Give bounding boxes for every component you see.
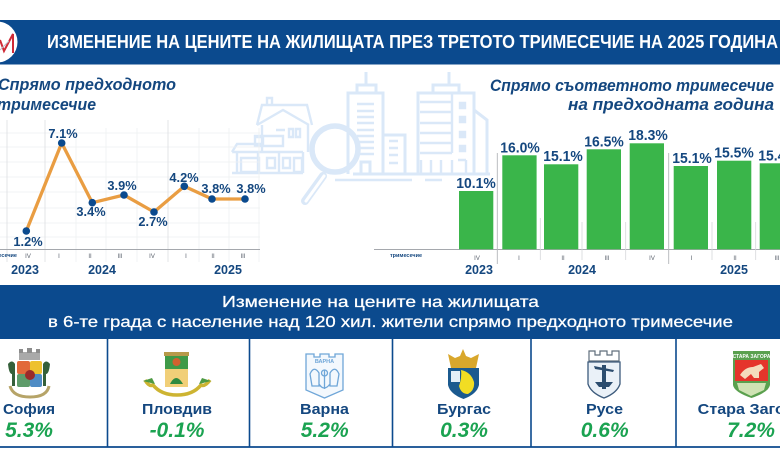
quarter labels: II: [211, 254, 215, 260]
data labels: 7.1%: [48, 126, 78, 141]
panel: Бургас: [437, 349, 491, 442]
right heading: [490, 77, 774, 114]
quarter labels: III: [774, 256, 780, 262]
quarter labels: [390, 253, 780, 262]
bar chart: change vs same quarter of previous year: [374, 128, 780, 277]
panel: София: 5.3%: [5, 419, 53, 442]
left heading: тримесечие: [0, 96, 96, 114]
city panels: [0, 339, 780, 447]
quarter labels: I: [185, 254, 187, 260]
panel: Стара Загора: [698, 351, 780, 442]
icon: Plovdiv crest: [143, 352, 211, 395]
icon: Stara Zagora crest: СТАРА ЗАГОРА: [733, 354, 771, 360]
data labels: 3.4%: [76, 204, 106, 219]
icon: Ruse crest: [588, 351, 620, 398]
panel: Русе: 0.6%: [581, 419, 629, 442]
panel: Русе: Русе: [586, 401, 623, 418]
bar labels: 10.1%: [456, 176, 496, 192]
quarter labels: I: [58, 254, 60, 260]
bar labels: 18.3%: [628, 128, 668, 144]
year labels: [465, 263, 748, 277]
line chart: change vs previous quarter: [0, 120, 266, 277]
line series: [26, 143, 245, 231]
left heading: Спрямо предходното: [0, 76, 176, 94]
quarter labels: III: [117, 254, 123, 260]
panel: Русе: [581, 351, 629, 442]
year labels: 2025: [720, 263, 748, 277]
right heading: на предходната година: [568, 96, 774, 114]
data labels: [13, 126, 266, 249]
year labels: 2023: [11, 263, 39, 277]
section band: cities heading: Изменение на цените на жилищата: [222, 294, 539, 311]
quarter labels: II: [88, 254, 92, 260]
quarter labels: III: [240, 254, 246, 260]
year labels: 2024: [88, 263, 116, 277]
panel: Варна: [300, 354, 350, 442]
panel: Пловдив: Пловдив: [142, 401, 212, 418]
icon: Sofia crest: [8, 348, 50, 397]
icon: Burgas crest: [448, 349, 479, 399]
bar labels: 16.5%: [584, 135, 624, 151]
panel: София: София: [3, 401, 55, 418]
data points: [22, 139, 249, 235]
year labels: 2023: [465, 263, 493, 277]
background illustration: houses, magnifier and towers: [232, 72, 490, 201]
header bar: [0, 20, 780, 64]
quarter labels: I: [691, 256, 693, 262]
panel: Бургас: 0.3%: [440, 419, 488, 442]
bars: [459, 143, 780, 249]
data labels: 3.9%: [107, 178, 137, 193]
left heading: [0, 76, 176, 114]
panel: Бургас: Бургас: [437, 401, 491, 418]
data labels: 3.8%: [236, 181, 266, 196]
quarter labels: IV: [649, 256, 655, 262]
panel: Пловдив: -0.1%: [150, 419, 205, 442]
section band: cities heading: [0, 285, 780, 339]
year labels: 2024: [568, 263, 596, 277]
bar labels: 16.0%: [500, 141, 540, 157]
data labels: 1.2%: [13, 234, 43, 249]
panel: Пловдив: [142, 352, 212, 442]
quarter labels: [0, 253, 246, 260]
panel: Варна: 5.2%: [301, 419, 349, 442]
panel: Варна: Варна: [300, 401, 350, 418]
quarter labels: II: [733, 256, 737, 262]
panel: София: [3, 348, 55, 442]
quarter labels: IV: [25, 254, 31, 260]
quarter labels: III: [604, 256, 610, 262]
data labels: 2.7%: [138, 214, 168, 229]
year labels: 2025: [214, 263, 242, 277]
data labels: 4.2%: [169, 170, 199, 185]
section band: cities heading: в 6-те града с население над 120 хил. жители спрямо предходното тримесечие: [48, 314, 733, 331]
bar labels: [456, 128, 780, 192]
year labels: [11, 263, 242, 277]
quarter labels: тримесечие: [390, 253, 422, 259]
icon: Varna crest: ВАРНА: [315, 359, 334, 365]
panel: Стара Загора: 7.2%: [727, 419, 775, 442]
logo: [0, 22, 18, 62]
bar labels: 15.1%: [672, 151, 712, 167]
bar labels: 15.5%: [714, 145, 754, 161]
bar labels: 15.1%: [543, 149, 583, 165]
data labels: 3.8%: [201, 181, 231, 196]
quarter labels: IV: [149, 254, 155, 260]
quarter labels: IV: [474, 256, 480, 262]
quarter labels: I: [518, 256, 520, 262]
quarter labels: II: [561, 256, 565, 262]
